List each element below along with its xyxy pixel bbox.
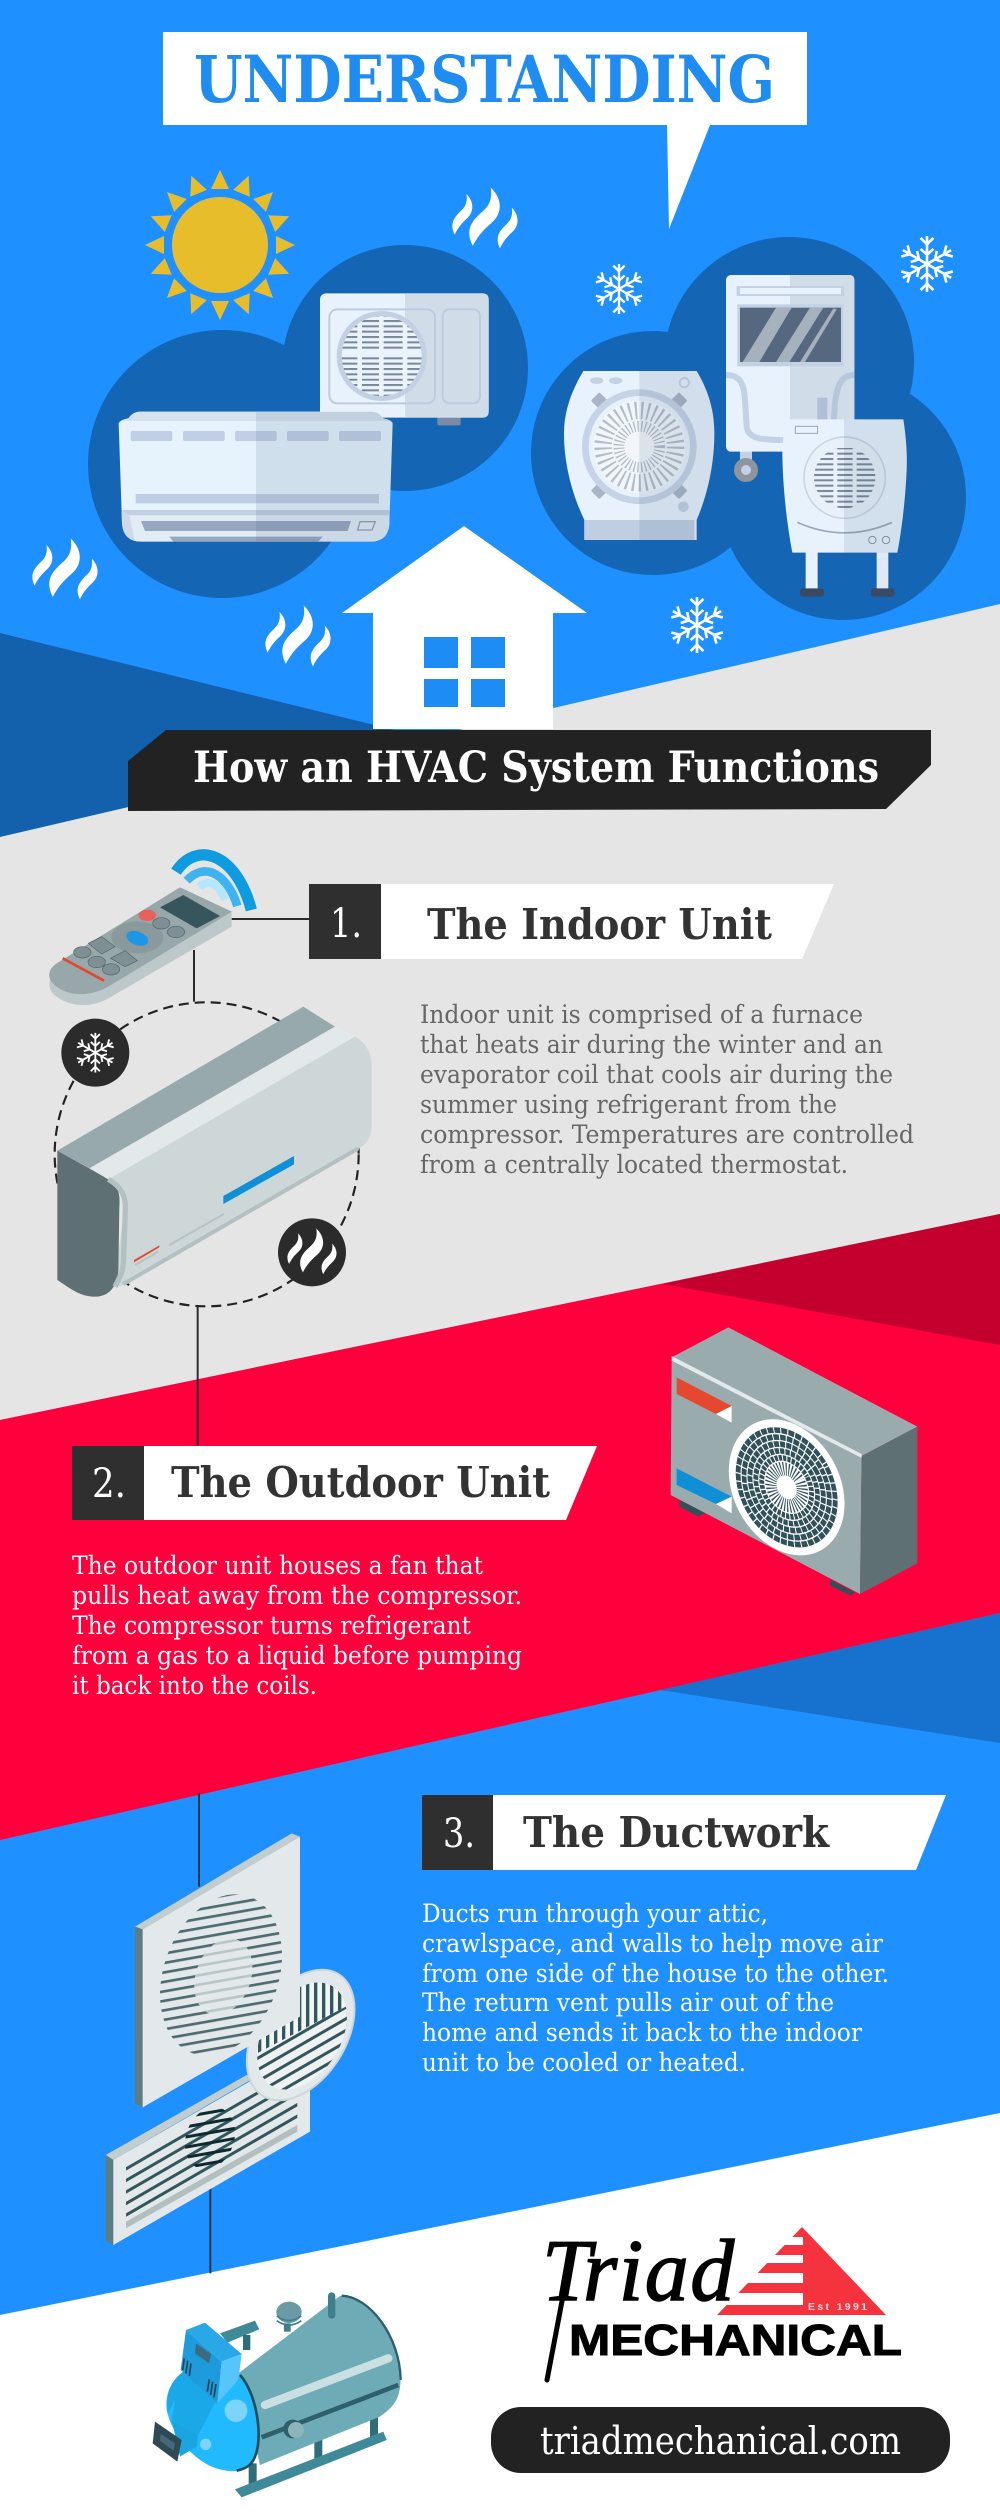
small air cooler on legs	[782, 418, 909, 597]
tall air cooler	[726, 275, 854, 482]
icon: heat wisps left	[31, 537, 99, 601]
step 1 body text: that heats air during the winter and an	[420, 1030, 883, 1059]
illustration: outdoor AC unit and wall AC unit	[119, 293, 489, 543]
background: white footer	[0, 2113, 1000, 2515]
burner	[166, 2372, 259, 2471]
step 2 body text: The outdoor unit houses a fan that	[72, 1551, 483, 1580]
step 3 heading: The Ductwork	[523, 1808, 830, 1857]
logo: Triad Mechanical	[542, 2223, 902, 2380]
dark blue blobs behind heating units	[88, 245, 528, 598]
logo triangle	[700, 2227, 886, 2315]
background: red section	[0, 1214, 1000, 1840]
step 2 body text: pulls heat away from the compressor.	[72, 1581, 522, 1610]
icon: remote control	[49, 855, 251, 1005]
illustration: cooler units	[564, 275, 909, 597]
subtitle text: How an HVAC System Functions	[193, 743, 879, 793]
fan heater	[564, 370, 716, 542]
legs	[253, 2415, 374, 2485]
icon: heat badge	[278, 1218, 346, 1286]
logo script word: T	[542, 2223, 597, 2320]
round vent	[246, 1968, 356, 2102]
step 2 body text	[72, 1551, 522, 1700]
step 3 body text: Ducts run through your attic,	[422, 1899, 768, 1928]
dark blue blobs behind cooling units	[531, 237, 966, 620]
logo script word	[542, 2223, 736, 2380]
icon: house	[342, 526, 587, 729]
icon: heat wisps centre	[264, 604, 332, 668]
website pill	[491, 2407, 950, 2473]
indoor wall unit	[57, 1007, 372, 1297]
background: dark blue wedge	[0, 633, 427, 837]
step 3 body text: from one side of the house to the other.	[422, 1959, 889, 1988]
step 2 heading: The Outdoor Unit	[171, 1458, 551, 1507]
step 1 body text: compressor. Temperatures are controlled	[420, 1120, 914, 1149]
step 3 body text: crawlspace, and walls to help move air	[422, 1929, 883, 1958]
step 1 body text: from a centrally located thermostat.	[420, 1150, 848, 1179]
illustration: remote, indoor unit and connectors	[49, 855, 372, 1446]
rectangular vent	[106, 2047, 310, 2245]
step 3 body text	[422, 1899, 889, 2077]
step 2 body text: it back into the coils.	[72, 1671, 317, 1700]
step 1 heading: The Indoor Unit	[427, 900, 773, 949]
outdoor condenser	[320, 293, 489, 425]
step 2 body text: from a gas to a liquid before pumping	[72, 1641, 522, 1670]
step 1 heading	[309, 884, 834, 959]
icon: snowflake left	[595, 264, 643, 314]
illustration: furnace boiler	[153, 2296, 401, 2497]
tank	[238, 2296, 401, 2465]
step 2 body text: The compressor turns refrigerant	[72, 1611, 471, 1640]
connector lines	[194, 919, 310, 1446]
step 1 body text: Indoor unit is comprised of a furnace	[420, 1000, 863, 1029]
icon: snowflake badge	[61, 1019, 129, 1087]
website pill: triadmechanical.com	[540, 2419, 901, 2463]
icon: snowflake bottom	[670, 597, 724, 653]
wall split unit	[119, 412, 396, 543]
background: dark red wedge	[663, 1214, 1000, 1345]
step 3 body text: unit to be cooled or heated.	[422, 2048, 746, 2077]
icon: sun	[145, 170, 295, 320]
logo triangle: Est 1991	[808, 2301, 867, 2313]
step 1 body text	[420, 1000, 914, 1179]
step 2 heading: 2.	[92, 1461, 126, 1507]
house window	[424, 637, 505, 707]
icon: snowflake right	[900, 236, 954, 292]
title text: UNDERSTANDING	[194, 42, 775, 118]
subtitle banner	[128, 730, 931, 811]
background: grey section	[0, 604, 1000, 1420]
control box	[186, 2323, 242, 2362]
step 1 heading: 1.	[330, 901, 362, 947]
dashed circle	[55, 1002, 359, 1306]
step 1 body text: summer using refrigerant from the	[420, 1090, 837, 1119]
illustration: ductwork vents	[106, 1793, 377, 2273]
fan grille	[706, 1399, 867, 1576]
illustration: outdoor unit	[671, 1327, 917, 1595]
step 2 heading	[72, 1446, 597, 1520]
step 3 heading: 3.	[443, 1811, 475, 1857]
connector lines	[199, 1793, 210, 2273]
square vent	[135, 1833, 303, 2107]
outlet	[172, 2420, 198, 2457]
step 1 body text: evaporator coil that cools air during the	[420, 1060, 893, 1089]
title speech bubble	[163, 32, 807, 229]
step 3 body text: The return vent pulls air out of the	[422, 1988, 834, 2017]
logo script word: riad	[583, 2223, 736, 2320]
icon: heat wisps top	[451, 186, 519, 250]
step 3 body text: home and sends it back to the indoor	[422, 2018, 862, 2047]
logo wordmark: MECHANICAL	[569, 2316, 902, 2365]
step 3 heading	[422, 1795, 946, 1870]
background: mid blue wedge	[660, 1613, 1000, 1743]
